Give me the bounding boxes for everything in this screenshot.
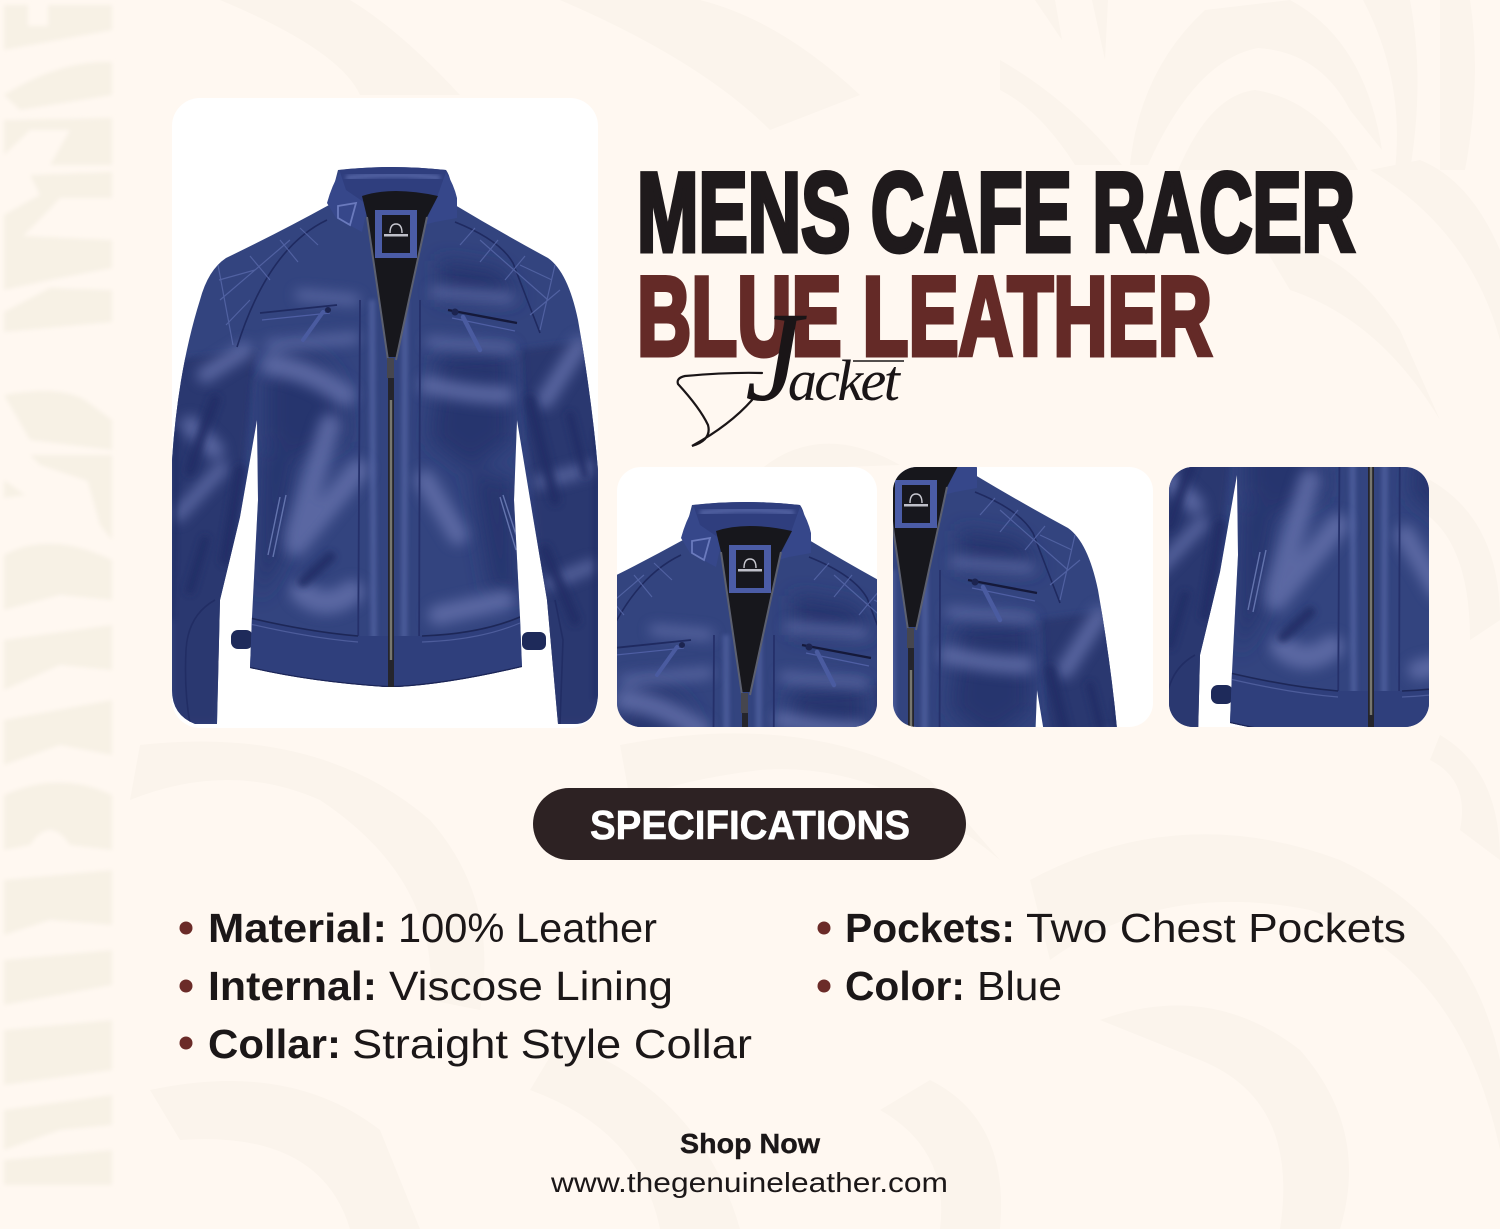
script word: Jacket: Jacket bbox=[745, 286, 902, 428]
spec: internal: Internal: bbox=[208, 963, 377, 1009]
spec: color: Blue bbox=[977, 963, 1062, 1009]
spec: collar: Collar: bbox=[208, 1021, 341, 1067]
panel: main jacket photo bbox=[172, 98, 598, 728]
spec: pockets: Pockets: bbox=[845, 905, 1015, 951]
specification list: right column bbox=[818, 905, 1406, 1009]
shop now call to action: Shop Now bbox=[680, 1128, 820, 1159]
spec: internal bbox=[180, 963, 673, 1009]
shop now call to action: www.thegenuineleather.com bbox=[550, 1167, 948, 1198]
spec: pockets: Two Chest Pockets bbox=[1026, 905, 1406, 951]
spec: material bbox=[180, 905, 657, 951]
watermark: left vertical band bbox=[4, 5, 112, 1185]
spec: color: Color: bbox=[845, 963, 965, 1009]
spec: collar: Straight Style Collar bbox=[352, 1021, 752, 1067]
spec: color bbox=[818, 963, 1062, 1009]
thumbnail: collar close-up bbox=[617, 467, 877, 727]
spec: internal: Viscose Lining bbox=[389, 963, 673, 1009]
shop now call to action bbox=[550, 1128, 948, 1198]
specifications heading pill: SPECIFICATIONS bbox=[590, 802, 910, 848]
thumbnail: zipper and hem close-up bbox=[1169, 467, 1429, 727]
spec: pockets bbox=[818, 905, 1406, 951]
title line 2: BLUE LEATHER bbox=[637, 254, 1212, 379]
spec: material: 100% Leather bbox=[398, 905, 657, 951]
title bbox=[637, 150, 1355, 379]
specifications heading pill bbox=[533, 788, 966, 860]
spec: collar bbox=[180, 1021, 752, 1067]
specification list: left column bbox=[180, 905, 752, 1067]
script word: Jacket bbox=[678, 286, 904, 446]
spec: material: Material: bbox=[208, 905, 387, 951]
thumbnail: chest pocket close-up bbox=[893, 467, 1153, 727]
